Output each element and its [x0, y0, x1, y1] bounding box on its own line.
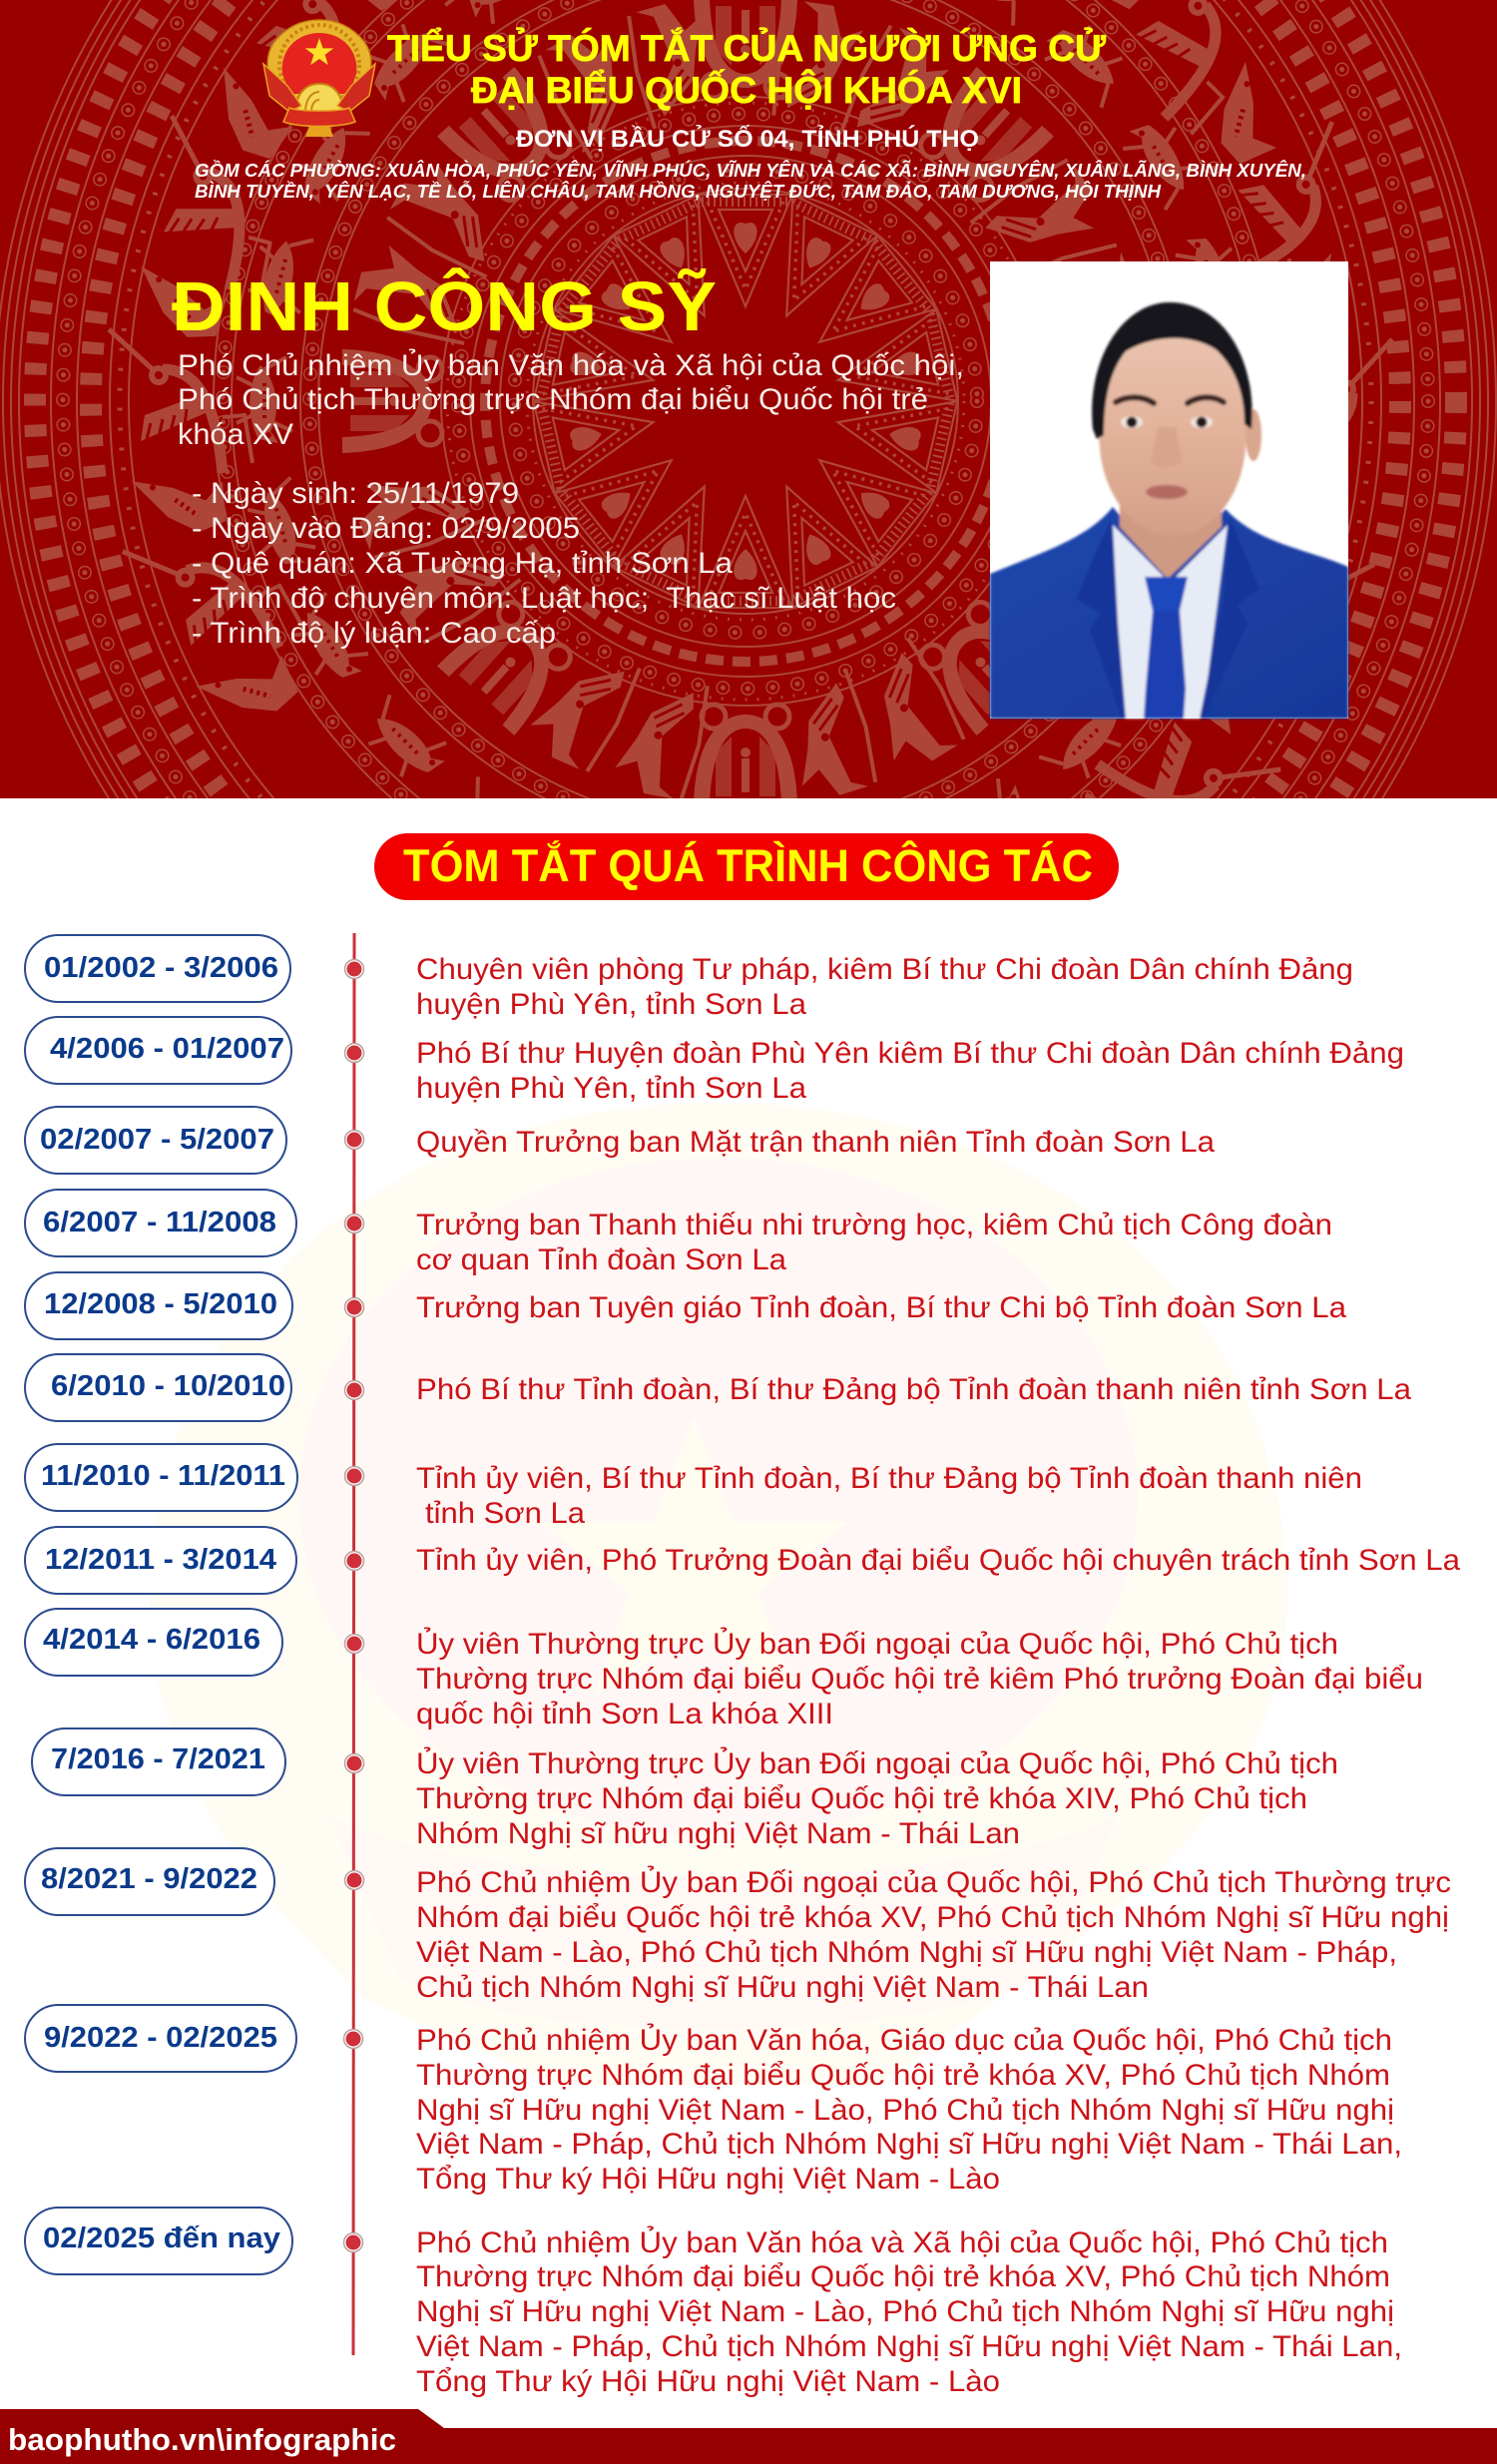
entry 1 text	[416, 953, 1353, 1021]
entry 12 text: Phó Chủ nhiệm Ủy ban Văn hóa, Giáo dục của Quốc hội, Phó Chủ tịch	[416, 2023, 1392, 2057]
entry 1 date: 01/2002 - 3/2006	[44, 952, 278, 984]
section heading pill: TÓM TẮT QUÁ TRÌNH CÔNG TÁC	[403, 840, 1093, 891]
entry 10 text	[416, 1746, 1338, 1850]
entry 12 date: 9/2022 - 02/2025	[44, 2022, 277, 2054]
personal details: - Quê quán: Xã Tường Hạ, tỉnh Sơn La	[192, 547, 733, 580]
entry 12 marker	[343, 2030, 363, 2048]
entry 11 text: Việt Nam - Lào, Phó Chủ tịch Nhóm Nghị sĩ Hữu nghị Việt Nam - Pháp,	[416, 1936, 1397, 1969]
drum pattern: centre star	[534, 195, 957, 608]
entry 13 date	[25, 2208, 292, 2274]
entry 13 text: Phó Chủ nhiệm Ủy ban Văn hóa và Xã hội của Quốc hội, Phó Chủ tịch	[416, 2225, 1388, 2259]
entry 1 date	[25, 935, 290, 1002]
entry 11 text: Phó Chủ nhiệm Ủy ban Đối ngoại của Quốc hội, Phó Chủ tịch Thường trực	[416, 1865, 1451, 1899]
entry 12 text: Việt Nam - Pháp, Chủ tịch Nhóm Nghị sĩ Hữu nghị Việt Nam - Thái Lan,	[416, 2128, 1402, 2161]
entry 10 text: Ủy viên Thường trực Ủy ban Đối ngoại của Quốc hội, Phó Chủ tịch	[416, 1746, 1338, 1780]
candidate position: Phó Chủ tịch Thường trực Nhóm đại biểu Quốc hội trẻ	[178, 383, 928, 416]
entry 13 text: Thường trực Nhóm đại biểu Quốc hội trẻ khóa XV, Phó Chủ tịch Nhóm	[416, 2260, 1390, 2293]
entry 12 text	[416, 2023, 1402, 2196]
entry 9 text: quốc hội tỉnh Sơn La khóa XIII	[416, 1698, 833, 1730]
constituency wards text: GỒM CÁC PHƯỜNG: XUÂN HÒA, PHÚC YÊN, VĨNH PHÚC, VĨNH YÊN VÀ CÁC XÃ: BÌNH NGUYÊN, XUÂN LÃNG, BÌNH XUYÊN,	[195, 160, 1306, 181]
entry 13 date: 02/2025 đến nay	[43, 2222, 280, 2254]
watermark: pale national emblem	[150, 1103, 1287, 2086]
entry 9 marker	[345, 1635, 363, 1653]
entry 12 text: Nghị sĩ Hữu nghị Việt Nam - Lào, Phó Chủ tịch Nhóm Nghị sĩ Hữu nghị	[416, 2094, 1394, 2127]
entry 12 text: Thường trực Nhóm đại biểu Quốc hội trẻ khóa XV, Phó Chủ tịch Nhóm	[416, 2059, 1390, 2092]
entry 9 date: 4/2014 - 6/2016	[43, 1624, 260, 1656]
entry 8 text: Tỉnh ủy viên, Phó Trưởng Đoàn đại biểu Quốc hội chuyên trách tỉnh Sơn La	[416, 1544, 1460, 1577]
entry 7 text	[416, 1462, 1362, 1530]
personal details: - Trình độ lý luận: Cao cấp	[192, 617, 556, 650]
candidate position: khóa XV	[178, 418, 293, 451]
title	[387, 27, 1106, 111]
entry 7 date	[25, 1444, 297, 1511]
entry 5 text: Trưởng ban Tuyên giáo Tỉnh đoàn, Bí thư Chi bộ Tỉnh đoàn Sơn La	[416, 1291, 1346, 1324]
entry 4 marker	[345, 1214, 363, 1233]
entry 10 date	[32, 1728, 285, 1795]
personal details: - Trình độ chuyên môn: Luật học; Thạc sĩ Luật học	[192, 582, 896, 615]
entry 13 marker	[343, 2233, 363, 2251]
entry 5 marker	[345, 1297, 363, 1317]
entry 9 text: Ủy viên Thường trực Ủy ban Đối ngoại của Quốc hội, Phó Chủ tịch	[416, 1627, 1338, 1661]
portrait photo	[990, 261, 1348, 719]
entry 8 date: 12/2011 - 3/2014	[45, 1544, 276, 1576]
entry 5 date	[25, 1272, 292, 1339]
entry 12 text: Tổng Thư ký Hội Hữu nghị Việt Nam - Lào	[416, 2163, 1000, 2196]
entry 11 date	[25, 1848, 274, 1915]
icon: national emblem	[263, 20, 375, 137]
entry 6 date: 6/2010 - 10/2010	[51, 1370, 285, 1402]
entry 2 text: huyện Phù Yên, tỉnh Sơn La	[416, 1072, 806, 1105]
entry 1 text: Chuyên viên phòng Tư pháp, kiêm Bí thư Chi đoàn Dân chính Đảng	[416, 953, 1353, 986]
drum pattern: cranes and birds	[109, 0, 1392, 879]
entry 2 date	[25, 1017, 291, 1084]
personal details	[192, 477, 896, 650]
entry 7 date: 11/2010 - 11/2011	[41, 1460, 285, 1492]
entry 3 marker	[345, 1130, 363, 1150]
entry 1 marker	[345, 960, 363, 978]
entry 9 text	[416, 1627, 1423, 1730]
entry 6 date	[25, 1354, 291, 1421]
entry 11 date: 8/2021 - 9/2022	[41, 1863, 257, 1895]
entry 2 text	[416, 1037, 1404, 1105]
constituency wards text	[195, 160, 1306, 202]
entry 8 marker	[345, 1551, 363, 1571]
footer band	[0, 2409, 1497, 2464]
entry 9 date	[25, 1609, 282, 1676]
entry 2 date: 4/2006 - 01/2007	[50, 1033, 284, 1065]
entry 6 text: Phó Bí thư Tỉnh đoàn, Bí thư Đảng bộ Tỉnh đoàn thanh niên tỉnh Sơn La	[416, 1373, 1411, 1406]
entry 11 text: Chủ tịch Nhóm Nghị sĩ Hữu nghị Việt Nam - Thái Lan	[416, 1971, 1149, 2004]
entry 6 marker	[345, 1381, 363, 1399]
entry 11 text	[416, 1865, 1451, 2004]
entry 10 marker	[345, 1754, 363, 1772]
entry 4 date: 6/2007 - 11/2008	[43, 1207, 276, 1238]
candidate position	[178, 348, 964, 451]
entry 9 text: Thường trực Nhóm đại biểu Quốc hội trẻ kiêm Phó trưởng Đoàn đại biểu	[416, 1663, 1423, 1696]
entry 13 text: Tổng Thư ký Hội Hữu nghị Việt Nam - Lào	[416, 2365, 1000, 2398]
timeline axis	[353, 933, 354, 2355]
entry 2 marker	[345, 1044, 363, 1062]
entry 13 text	[416, 2225, 1402, 2398]
drum pattern: concentric rings	[0, 0, 1497, 798]
entry 3 text: Quyền Trưởng ban Mặt trận thanh niên Tỉnh đoàn Sơn La	[416, 1126, 1215, 1159]
footer band: baophutho.vn\infographic	[8, 2422, 396, 2457]
entry 11 marker	[345, 1870, 363, 1890]
entry 4 text: cơ quan Tỉnh đoàn Sơn La	[416, 1243, 786, 1276]
drum pattern: animals ring	[237, 0, 1254, 910]
entry 13 text: Nghị sĩ Hữu nghị Việt Nam - Lào, Phó Chủ tịch Nhóm Nghị sĩ Hữu nghị	[416, 2295, 1394, 2328]
candidate name: ĐINH CÔNG SỸ	[172, 266, 717, 345]
constituency heading: ĐƠN VỊ BẦU CỬ SỐ 04, TỈNH PHÚ THỌ	[516, 124, 979, 153]
entry 2 text: Phó Bí thư Huyện đoàn Phù Yên kiêm Bí thư Chi đoàn Dân chính Đảng	[416, 1037, 1404, 1070]
title: TIỂU SỬ TÓM TẮT CỦA NGƯỜI ỨNG CỬ	[387, 27, 1106, 69]
constituency wards text: BÌNH TUYỀN, YÊN LẠC, TỀ LỖ, LIÊN CHÂU, TAM HỒNG, NGUYỆT ĐỨC, TAM ĐẢO, TAM DƯƠNG, HỘI THỊNH	[195, 181, 1162, 202]
entry 5 date: 12/2008 - 5/2010	[44, 1288, 277, 1320]
entry 12 date	[25, 2005, 296, 2072]
entry 7 text: tỉnh Sơn La	[425, 1497, 585, 1530]
entry 3 date: 02/2007 - 5/2007	[40, 1124, 274, 1156]
header panel with bronze drum pattern	[0, 0, 1497, 798]
entry 7 text: Tỉnh ủy viên, Bí thư Tỉnh đoàn, Bí thư Đảng bộ Tỉnh đoàn thanh niên	[416, 1462, 1362, 1495]
entry 4 text: Trưởng ban Thanh thiếu nhi trường học, kiêm Chủ tịch Công đoàn	[416, 1209, 1332, 1241]
entry 4 date	[25, 1190, 296, 1256]
entry 13 text: Việt Nam - Pháp, Chủ tịch Nhóm Nghị sĩ Hữu nghị Việt Nam - Thái Lan,	[416, 2330, 1402, 2363]
personal details: - Ngày vào Đảng: 02/9/2005	[192, 512, 580, 545]
entry 3 date	[25, 1107, 286, 1174]
drum pattern: human figures	[342, 0, 1149, 804]
personal details: - Ngày sinh: 25/11/1979	[192, 477, 519, 510]
candidate position: Phó Chủ nhiệm Ủy ban Văn hóa và Xã hội của Quốc hội,	[178, 348, 964, 382]
entry 7 marker	[345, 1467, 363, 1485]
entry 11 text: Nhóm đại biểu Quốc hội trẻ khóa XV, Phó Chủ tịch Nhóm Nghị sĩ Hữu nghị	[416, 1901, 1449, 1934]
entry 8 date	[25, 1527, 296, 1594]
entry 4 text	[416, 1209, 1332, 1276]
entry 10 text: Thường trực Nhóm đại biểu Quốc hội trẻ khóa XIV, Phó Chủ tịch	[416, 1782, 1307, 1815]
entry 1 text: huyện Phù Yên, tỉnh Sơn La	[416, 988, 806, 1021]
entry 10 date: 7/2016 - 7/2021	[51, 1743, 265, 1775]
entry 10 text: Nhóm Nghị sĩ hữu nghị Việt Nam - Thái Lan	[416, 1817, 1020, 1850]
title: ĐẠI BIỂU QUỐC HỘI KHÓA XVI	[471, 69, 1022, 111]
